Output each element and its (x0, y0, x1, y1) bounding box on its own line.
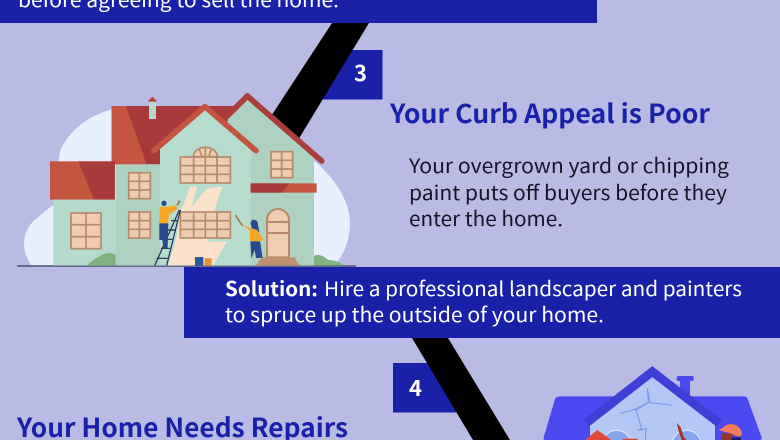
main roof (112, 106, 240, 164)
left low roof (50, 161, 115, 200)
solution bar: curb appeal: Solution: (225, 273, 318, 302)
heading: curb appeal: Your Curb Appeal is Poor (389, 94, 711, 131)
problem description: curb appeal (408, 150, 729, 232)
chimney (148, 97, 157, 119)
problem description: curb appeal: paint puts off buyers before they (409, 177, 728, 206)
connector line: lower diagonal (412, 338, 510, 440)
number badge 3: 3 (354, 56, 367, 88)
connector line: upper diagonal (262, 23, 369, 150)
steps (256, 257, 301, 266)
solution bar: curb appeal: Hire a professional landscaper and painters (324, 273, 742, 302)
windows (71, 147, 293, 249)
red shingles (585, 430, 612, 440)
illustration: house being painted (17, 96, 356, 267)
round windows (602, 430, 701, 440)
paint patch (168, 187, 227, 266)
painter on ladder (159, 201, 180, 248)
door (267, 209, 289, 257)
centre gable roof (154, 107, 256, 151)
solution bar: curb appeal: to spruce up the outside of your home. (225, 299, 604, 328)
painter on the ground (235, 215, 263, 259)
wall cracks (621, 388, 672, 440)
background blob (24, 109, 350, 266)
right gable roof (226, 96, 322, 161)
paint buckets (195, 257, 212, 266)
bushes (88, 253, 343, 266)
band (251, 183, 317, 193)
solution bar: curb appeal (184, 267, 780, 338)
problem description: curb appeal: enter the home. (409, 203, 563, 232)
ground line (17, 265, 356, 267)
back roof (543, 396, 762, 440)
illustration: house needing repairs (543, 372, 762, 440)
chimney (677, 376, 694, 400)
front wall (590, 376, 715, 440)
worker with hard hat (718, 424, 742, 440)
number badge 4 (393, 363, 459, 412)
solution bar: previous tip (0, 0, 597, 23)
number badge 3 (320, 50, 382, 100)
red shingle piece (623, 439, 638, 440)
number badge 4: 4 (409, 371, 422, 403)
gable roof (586, 372, 719, 423)
problem description: curb appeal: Your overgrown yard or chipping (408, 150, 729, 179)
ladder (155, 210, 180, 266)
walls (53, 98, 314, 266)
hammer (677, 423, 687, 440)
